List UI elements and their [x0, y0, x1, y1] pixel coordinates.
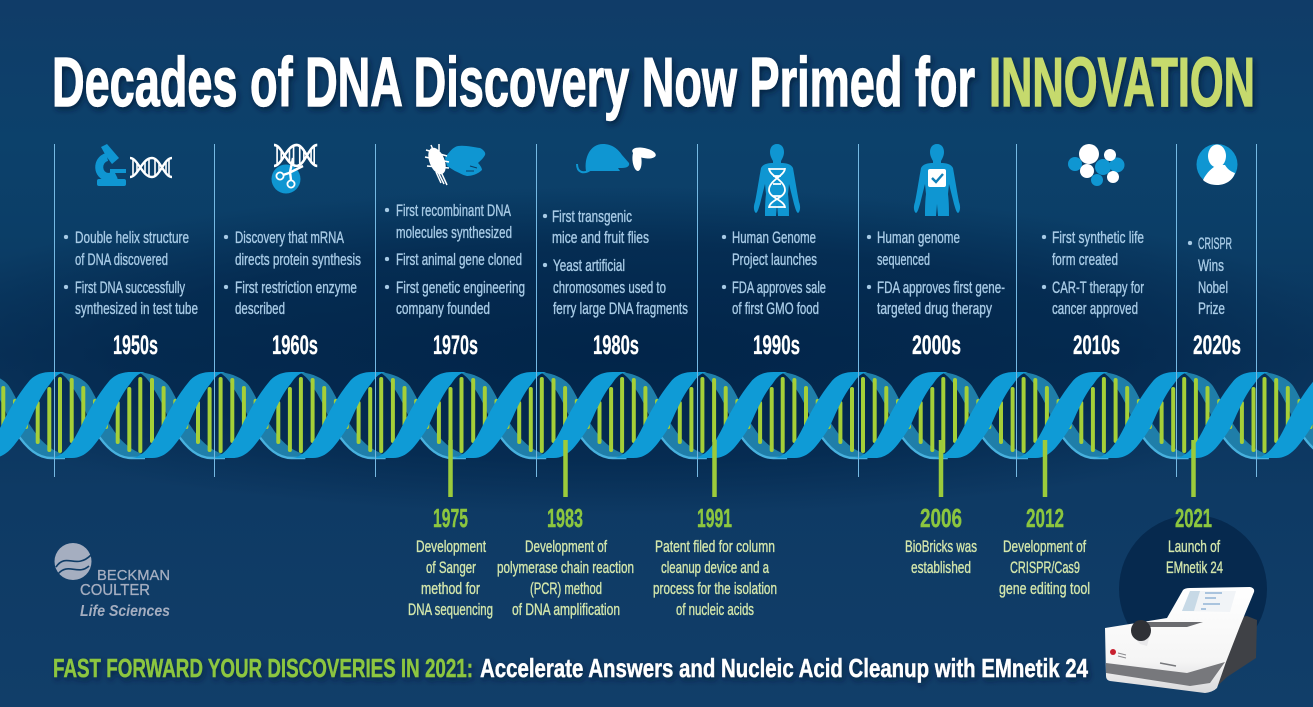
text: 1990s bullets: of first GMO food [732, 300, 819, 318]
text: 1960s bullets: First restriction enzyme [235, 279, 357, 297]
milestone: 1983: of DNA amplification [512, 601, 620, 619]
product: EMnetik 24 instrument [1105, 587, 1257, 693]
milestone: 2006: established [911, 559, 971, 577]
milestone: 2021 [1166, 503, 1223, 577]
milestone: 1983: 1983 [547, 503, 583, 533]
text: 1990s bullets: FDA approves sale [732, 279, 826, 297]
text: 1970s bullets: First animal gene cloned [396, 251, 522, 269]
milestone: 1983: (PCR) method [530, 580, 602, 598]
icon: mouse and fruit fly [577, 144, 657, 172]
footer tagline: Accelerate Answers and Nucleic Acid Cleanup with EMnetik 24 [480, 653, 1088, 683]
milestone: 2006: 2006 [920, 503, 962, 533]
text: 2020s bullets: Prize [1198, 300, 1225, 318]
logo: Beckman Coulter Life Sciences: BECKMAN [97, 567, 170, 584]
milestone: 1991: 1991 [697, 503, 732, 533]
decade label: 1950s [113, 330, 158, 360]
decade label: 1960s [272, 330, 318, 360]
decade label: 1990s [753, 330, 800, 360]
text: 2010s bullets: CAR-T therapy for [1052, 279, 1144, 297]
text: 2010s bullets [1042, 229, 1144, 318]
milestone: 1975: DNA sequencing [408, 601, 493, 619]
text: 1970s bullets: molecules synthesized [396, 224, 512, 242]
milestone: 2012: gene editing tool [999, 580, 1090, 598]
icon: bacterium and frog [425, 144, 485, 185]
text: 2020s bullets: CRISPR [1198, 235, 1232, 253]
decade label: 2000s [912, 330, 961, 360]
milestone: 2006: BioBricks was [905, 538, 977, 556]
panel: 1990s [722, 144, 826, 360]
milestone: 2012: Development of [1003, 538, 1086, 556]
milestone: 1983: Development of [525, 538, 607, 556]
text: 2000s bullets: sequenced [877, 251, 930, 269]
logo: Beckman Coulter Life Sciences [54, 543, 170, 620]
text: 2010s bullets: form created [1052, 251, 1118, 269]
panel: 1980s [543, 144, 688, 360]
text: 1980s bullets: Yeast artificial [553, 257, 625, 275]
DNA double helix timeline [0, 372, 1313, 459]
text: 2010s bullets: First synthetic life [1052, 229, 1144, 247]
text: 1980s bullets: ferry large DNA fragments [553, 300, 688, 318]
text: 1960s bullets: directs protein synthesis [235, 251, 361, 269]
text: 1960s bullets: described [235, 300, 285, 318]
text: 2000s bullets: targeted drug therapy [877, 300, 993, 318]
text: 1970s bullets: company founded [396, 300, 490, 318]
milestone: 1991: of nucleic acids [676, 601, 754, 619]
icon: DNA and scissors [272, 145, 317, 194]
text: 2000s bullets: FDA approves first gene- [877, 279, 1005, 297]
text: 1990s bullets [722, 229, 826, 318]
icon: synthetic cells [1068, 144, 1124, 186]
text: 1970s bullets [385, 202, 525, 318]
dark circle behind product [1119, 515, 1267, 663]
text: 2020s bullets: Nobel [1198, 279, 1228, 297]
icon: microscope and DNA [97, 144, 172, 186]
panel: 2000s [867, 144, 1005, 360]
icon: human with check box [914, 144, 960, 216]
milestone: 2021: EMnetik 24 [1166, 559, 1223, 577]
text: 1980s bullets: First transgenic [552, 208, 632, 226]
milestone: 2012: 2012 [1026, 503, 1064, 533]
panel: 1960s [224, 145, 361, 360]
text: 1980s bullets: chromosomes used to [553, 279, 666, 297]
text: 1950s bullets: of DNA discovered [75, 251, 168, 269]
milestone stems [450, 440, 1194, 497]
text: 1950s bullets: First DNA successfully [75, 279, 185, 297]
decade label: 1980s [593, 330, 639, 360]
text: 1950s bullets: Double helix structure [75, 229, 189, 247]
icon: human with DNA [754, 144, 800, 216]
decade label: 2010s [1073, 330, 1120, 360]
text: 1970s bullets: First genetic engineering [396, 279, 525, 297]
footer tagline [53, 653, 1088, 683]
milestone: 1975: method for [421, 580, 480, 598]
text: 1980s bullets: mice and fruit flies [552, 229, 649, 247]
decade label: 2020s [1193, 330, 1241, 360]
milestone: 1975: of Sanger [426, 559, 476, 577]
milestone: 1975: 1975 [433, 503, 468, 533]
milestone: 2021: 2021 [1175, 503, 1212, 533]
milestone: 2012 [999, 503, 1090, 598]
milestone: 1991: process for the isolation [653, 580, 777, 598]
milestone: 2012: CRISPR/Cas9 [1010, 559, 1080, 577]
icon: Nobel medal [1196, 144, 1238, 185]
text: 1960s bullets [224, 229, 361, 318]
text: 2010s bullets: cancer approved [1052, 300, 1138, 318]
text: 1960s bullets: Discovery that mRNA [235, 229, 344, 247]
text: 1990s bullets: Project launches [732, 251, 817, 269]
panel: 1950s [64, 144, 198, 360]
text: 2020s bullets [1188, 235, 1232, 318]
panel: 2010s [1042, 144, 1144, 360]
text: 1990s bullets: Human Genome [732, 229, 816, 247]
text: 1950s bullets [64, 229, 198, 318]
milestone: 1983: polymerase chain reaction [497, 559, 634, 577]
footer tagline: FAST FORWARD YOUR DISCOVERIES IN 2021: [53, 653, 473, 683]
milestone: 1975 [408, 503, 493, 619]
milestone: 2021: Launch of [1168, 538, 1220, 556]
logo: Beckman Coulter Life Sciences: Life Sciences [80, 603, 170, 620]
text: 1980s bullets [543, 208, 688, 318]
milestone: 1991: cleanup device and a [661, 559, 770, 577]
text: 2000s bullets [867, 229, 1005, 318]
text: 1970s bullets: First recombinant DNA [396, 202, 511, 220]
milestone: 1983 [497, 503, 634, 619]
text: 1950s bullets: synthesized in test tube [75, 300, 198, 318]
panel: 1970s [385, 144, 525, 360]
milestone: 2006 [905, 503, 977, 577]
panel: 2020s [1188, 144, 1241, 360]
text: 2000s bullets: Human genome [877, 229, 960, 247]
milestone: 1975: Development [416, 538, 486, 556]
text: 2020s bullets: Wins [1198, 257, 1224, 275]
logo: Beckman Coulter Life Sciences: COULTER [80, 582, 150, 599]
milestone: 1991: Patent filed for column [655, 538, 775, 556]
milestone: 1991 [653, 503, 777, 619]
decade label: 1970s [433, 330, 478, 360]
